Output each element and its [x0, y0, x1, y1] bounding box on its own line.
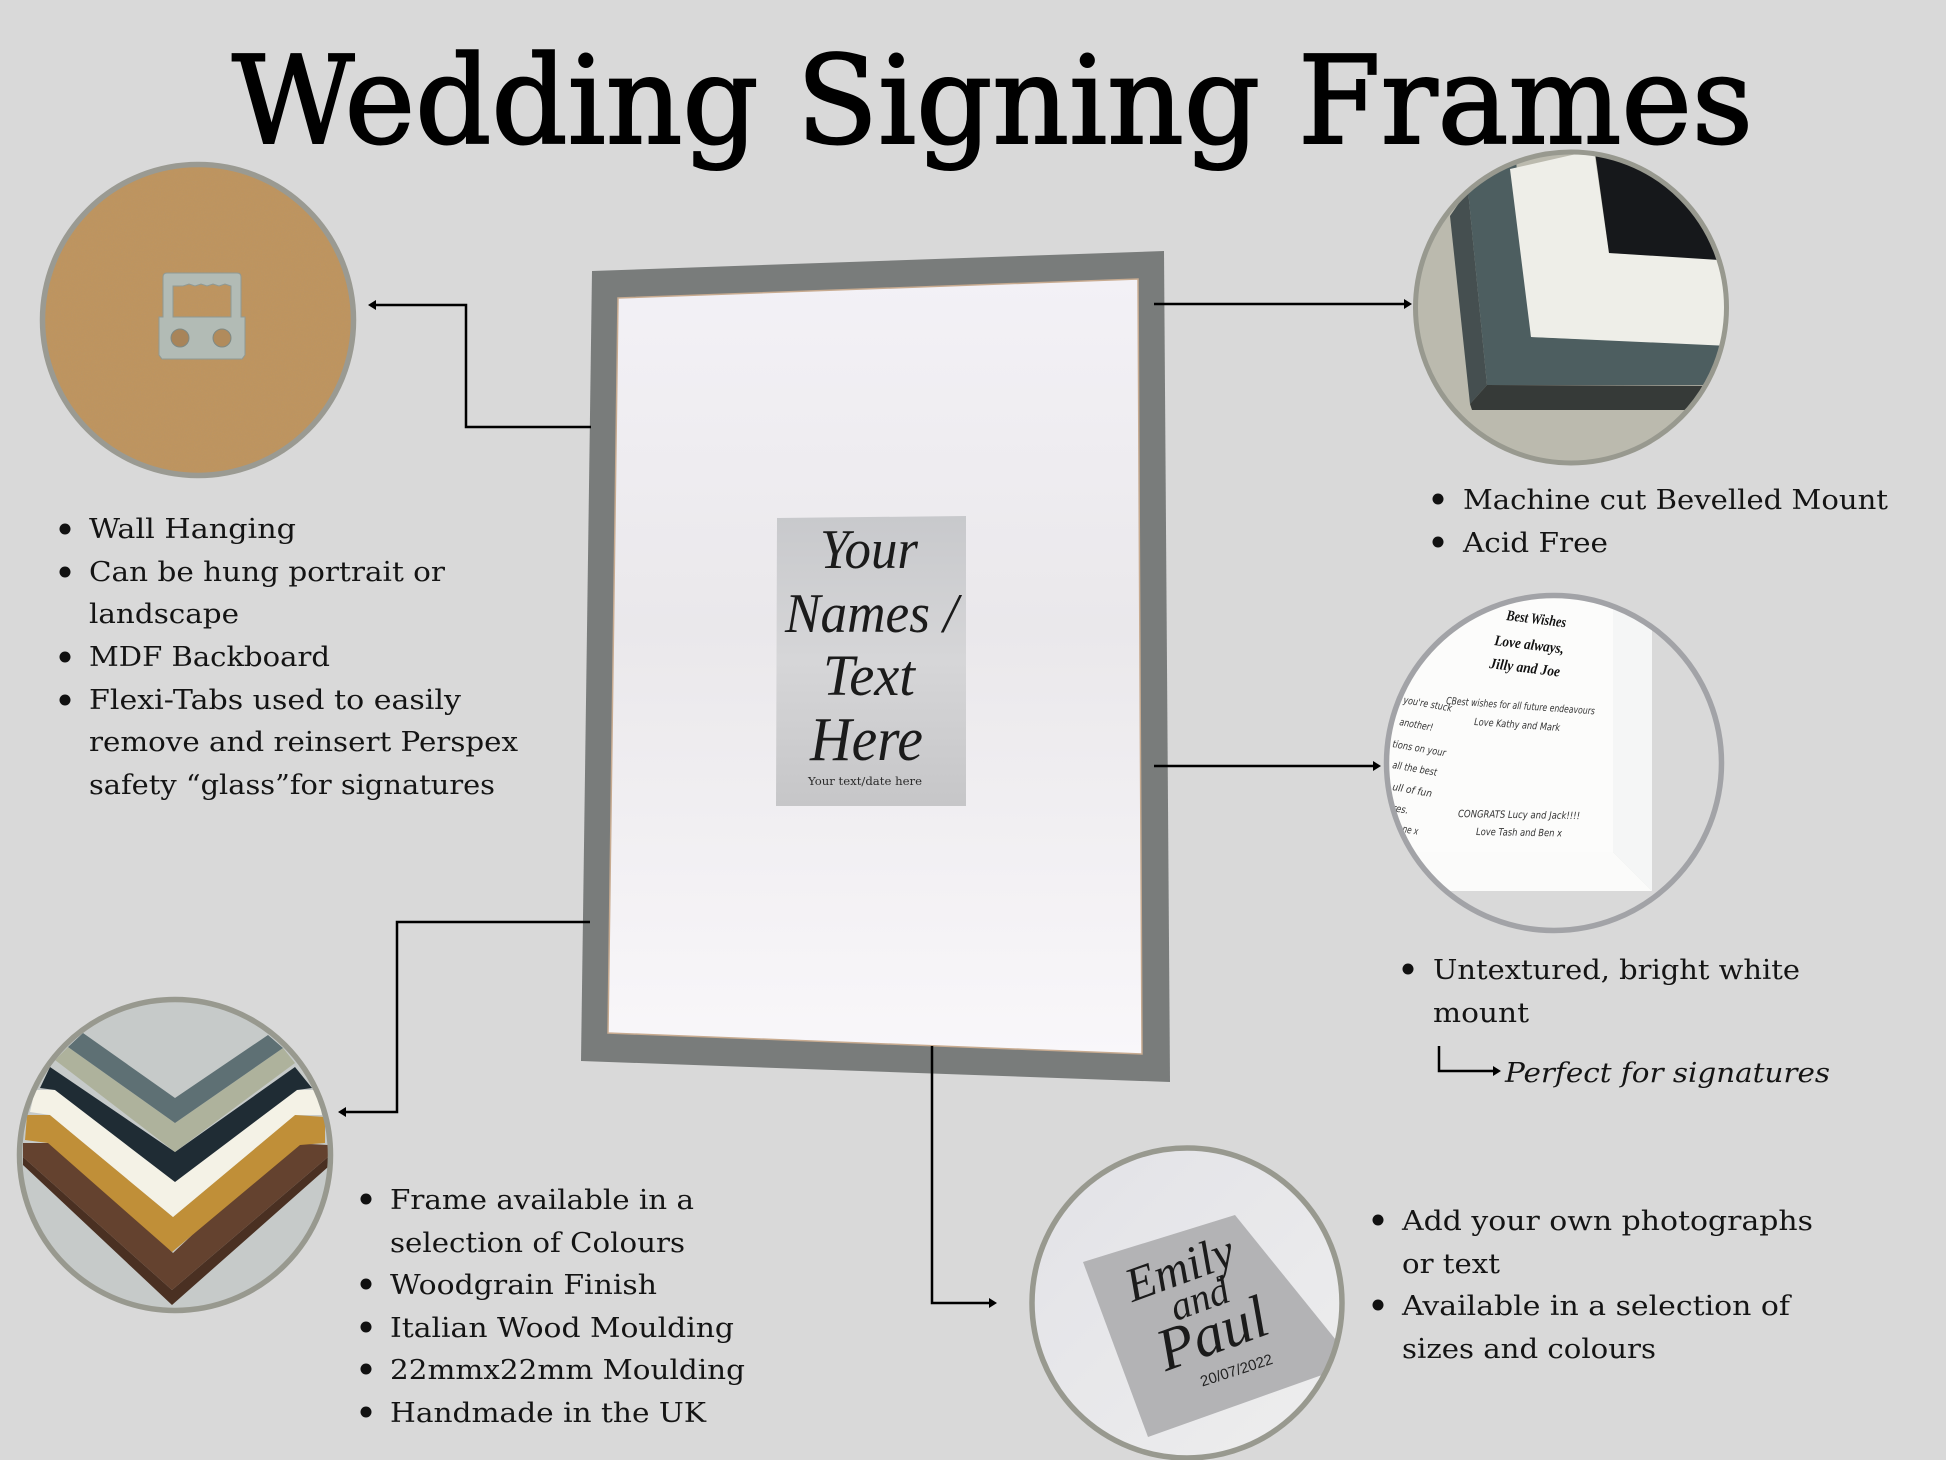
handwritten signatures: Best Wishes	[1505, 608, 1567, 631]
arrow: frame to custom text	[932, 1046, 997, 1308]
text block: backboard features: Flexi-Tabs used to easily	[89, 684, 462, 716]
central frame product image	[581, 251, 1170, 1082]
mount	[608, 279, 1142, 1054]
text block: personalisation features	[1372, 1205, 1813, 1365]
icon: wall hanger	[159, 273, 245, 359]
frame moulding	[581, 251, 1170, 1082]
arrow: frame to backboard	[368, 300, 591, 427]
text block: mount features: Acid Free	[1462, 527, 1608, 559]
aperture with names: Your text/date here	[807, 774, 922, 788]
circle: personalised names: Emily	[1117, 1224, 1242, 1313]
text block: backboard features: landscape	[89, 598, 239, 630]
text block: personalisation features: or text	[1402, 1248, 1500, 1280]
arrow: perfect for signatures	[1439, 1046, 1501, 1076]
text block: backboard features: MDF Backboard	[89, 641, 330, 673]
handwritten signatures: Love Tash and Ben x	[1476, 827, 1562, 840]
handwritten signatures: Jilly and Joe	[1488, 656, 1561, 681]
handwritten signatures: res.	[1391, 803, 1409, 817]
text block: personalisation features: Add your own photographs	[1401, 1205, 1813, 1237]
circle: signatures on white mount	[1384, 594, 1724, 934]
aperture with names	[776, 516, 966, 806]
text block: frame features: Handmade in the UK	[390, 1397, 706, 1429]
text block: frame features	[360, 1184, 745, 1429]
handwritten signatures	[1391, 608, 1595, 840]
arrow: frame to mount corner	[1154, 299, 1412, 309]
text block: backboard features: Can be hung portrait or	[89, 556, 446, 588]
handwritten signatures: Love always,	[1493, 633, 1565, 658]
title: Wedding Signing Frames	[232, 30, 1753, 172]
circle: colour selection chevrons	[17, 997, 333, 1313]
text block: frame features: Frame available in a	[390, 1184, 694, 1216]
circle: personalised names: and	[1163, 1267, 1236, 1330]
handwritten signatures: you're stuck	[1402, 695, 1454, 715]
arrow: frame to signatures	[1154, 761, 1381, 771]
circle: personalised names	[1029, 1147, 1345, 1460]
text block: white mount	[1402, 954, 1830, 1089]
text block: backboard features: remove and reinsert Perspex	[89, 726, 519, 758]
text block: backboard features: safety “glass”for signatures	[89, 769, 495, 801]
text block: frame features: selection of Colours	[390, 1227, 685, 1259]
text block: frame features: Italian Wood Moulding	[390, 1312, 734, 1344]
text block: backboard features: Wall Hanging	[89, 513, 296, 545]
aperture with names: Text	[823, 643, 917, 708]
handwritten signatures: ull of fun	[1391, 782, 1433, 800]
text block: frame features: 22mmx22mm Moulding	[390, 1354, 745, 1386]
handwritten signatures: another!	[1398, 717, 1434, 734]
aperture with names: Your	[820, 519, 918, 581]
handwritten signatures: CBest wishes for all future endeavours	[1446, 696, 1595, 717]
circle: personalised names: Paul	[1147, 1283, 1277, 1384]
circle: mount corner detail	[1410, 145, 1735, 468]
text block: mount features	[1432, 484, 1888, 559]
text block: frame features: Woodgrain Finish	[390, 1269, 657, 1301]
text block: white mount: Untextured, bright white	[1433, 954, 1800, 986]
handwritten signatures: Love Kathy and Mark	[1474, 717, 1561, 734]
text block: personalisation features: Available in a selection of	[1401, 1290, 1792, 1322]
text block: personalisation features: sizes and colours	[1402, 1333, 1656, 1365]
handwritten signatures: tions on your	[1391, 739, 1447, 759]
arrow: frame to colours	[338, 922, 590, 1117]
handwritten signatures: CONGRATS Lucy and Jack!!!!	[1458, 809, 1580, 822]
text block: mount features: Machine cut Bevelled Mount	[1463, 484, 1888, 516]
circle: backboard with hanger	[42, 164, 354, 476]
handwritten signatures: all the best	[1391, 760, 1439, 779]
text block: backboard features	[60, 513, 519, 801]
circle: personalised names: 20/07/2022	[1198, 1351, 1275, 1390]
callout: Perfect for signatures	[1504, 1057, 1830, 1089]
text block: white mount: mount	[1433, 997, 1529, 1029]
aperture with names: Names /	[784, 583, 962, 645]
aperture with names: Here	[809, 706, 923, 774]
handwritten signatures: ne x	[1401, 824, 1419, 838]
